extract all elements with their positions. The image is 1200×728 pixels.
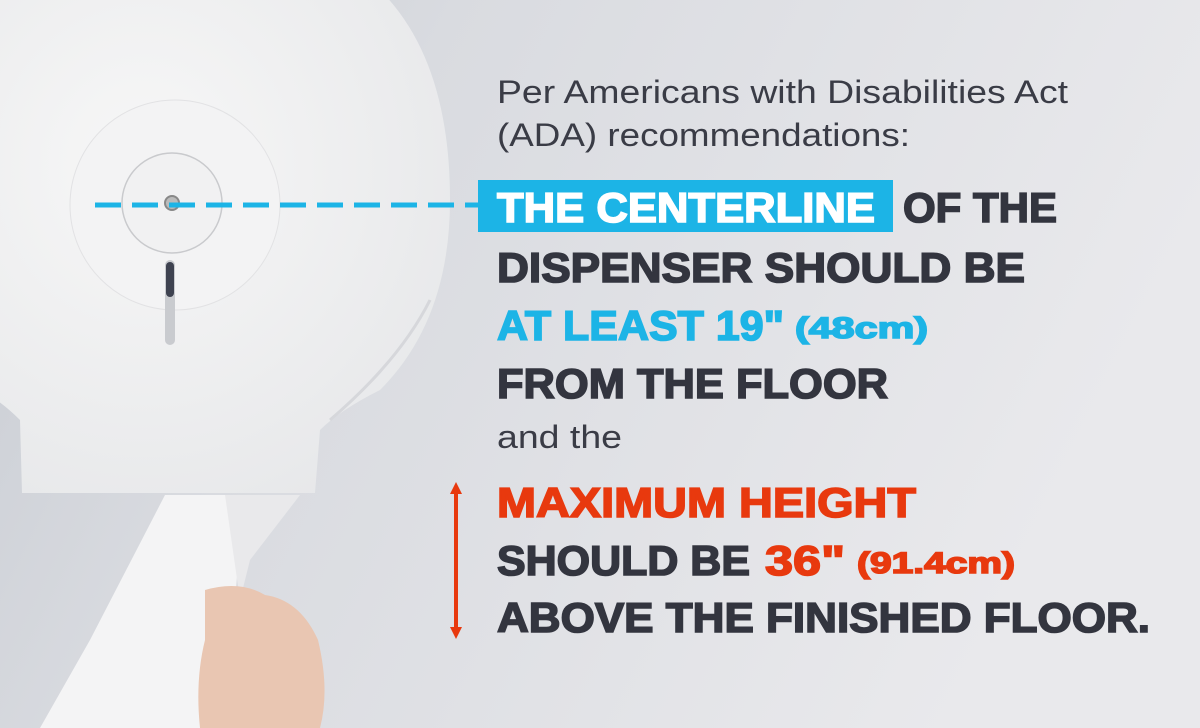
main statement: THE CENTERLINE (497, 184, 875, 231)
main statement: DISPENSER SHOULD BE (497, 244, 1025, 291)
hand (198, 586, 325, 728)
main statement: ABOVE THE FINISHED FLOOR. (497, 594, 1150, 641)
main statement: SHOULD BE (497, 537, 750, 584)
main statement: FROM THE FLOOR (497, 360, 888, 407)
dashed centerline (95, 202, 478, 208)
intro text: (ADA) recommendations: (497, 117, 910, 153)
main statement: (48cm) (795, 312, 928, 345)
intro text (497, 74, 1068, 153)
main statement: 36" (765, 537, 845, 584)
intro text: Per Americans with Disabilities Act (497, 74, 1068, 110)
highlight box (478, 180, 893, 232)
dispenser photo (0, 0, 450, 728)
paper (40, 495, 270, 728)
main statement: MAXIMUM HEIGHT (497, 479, 916, 526)
main statement: AT LEAST 19" (497, 302, 784, 349)
main statement: OF THE (903, 184, 1057, 231)
arrow: max height (450, 482, 462, 639)
main statement (497, 184, 1150, 641)
main statement: (91.4cm) (857, 547, 1015, 580)
main statement: and the (497, 419, 622, 455)
